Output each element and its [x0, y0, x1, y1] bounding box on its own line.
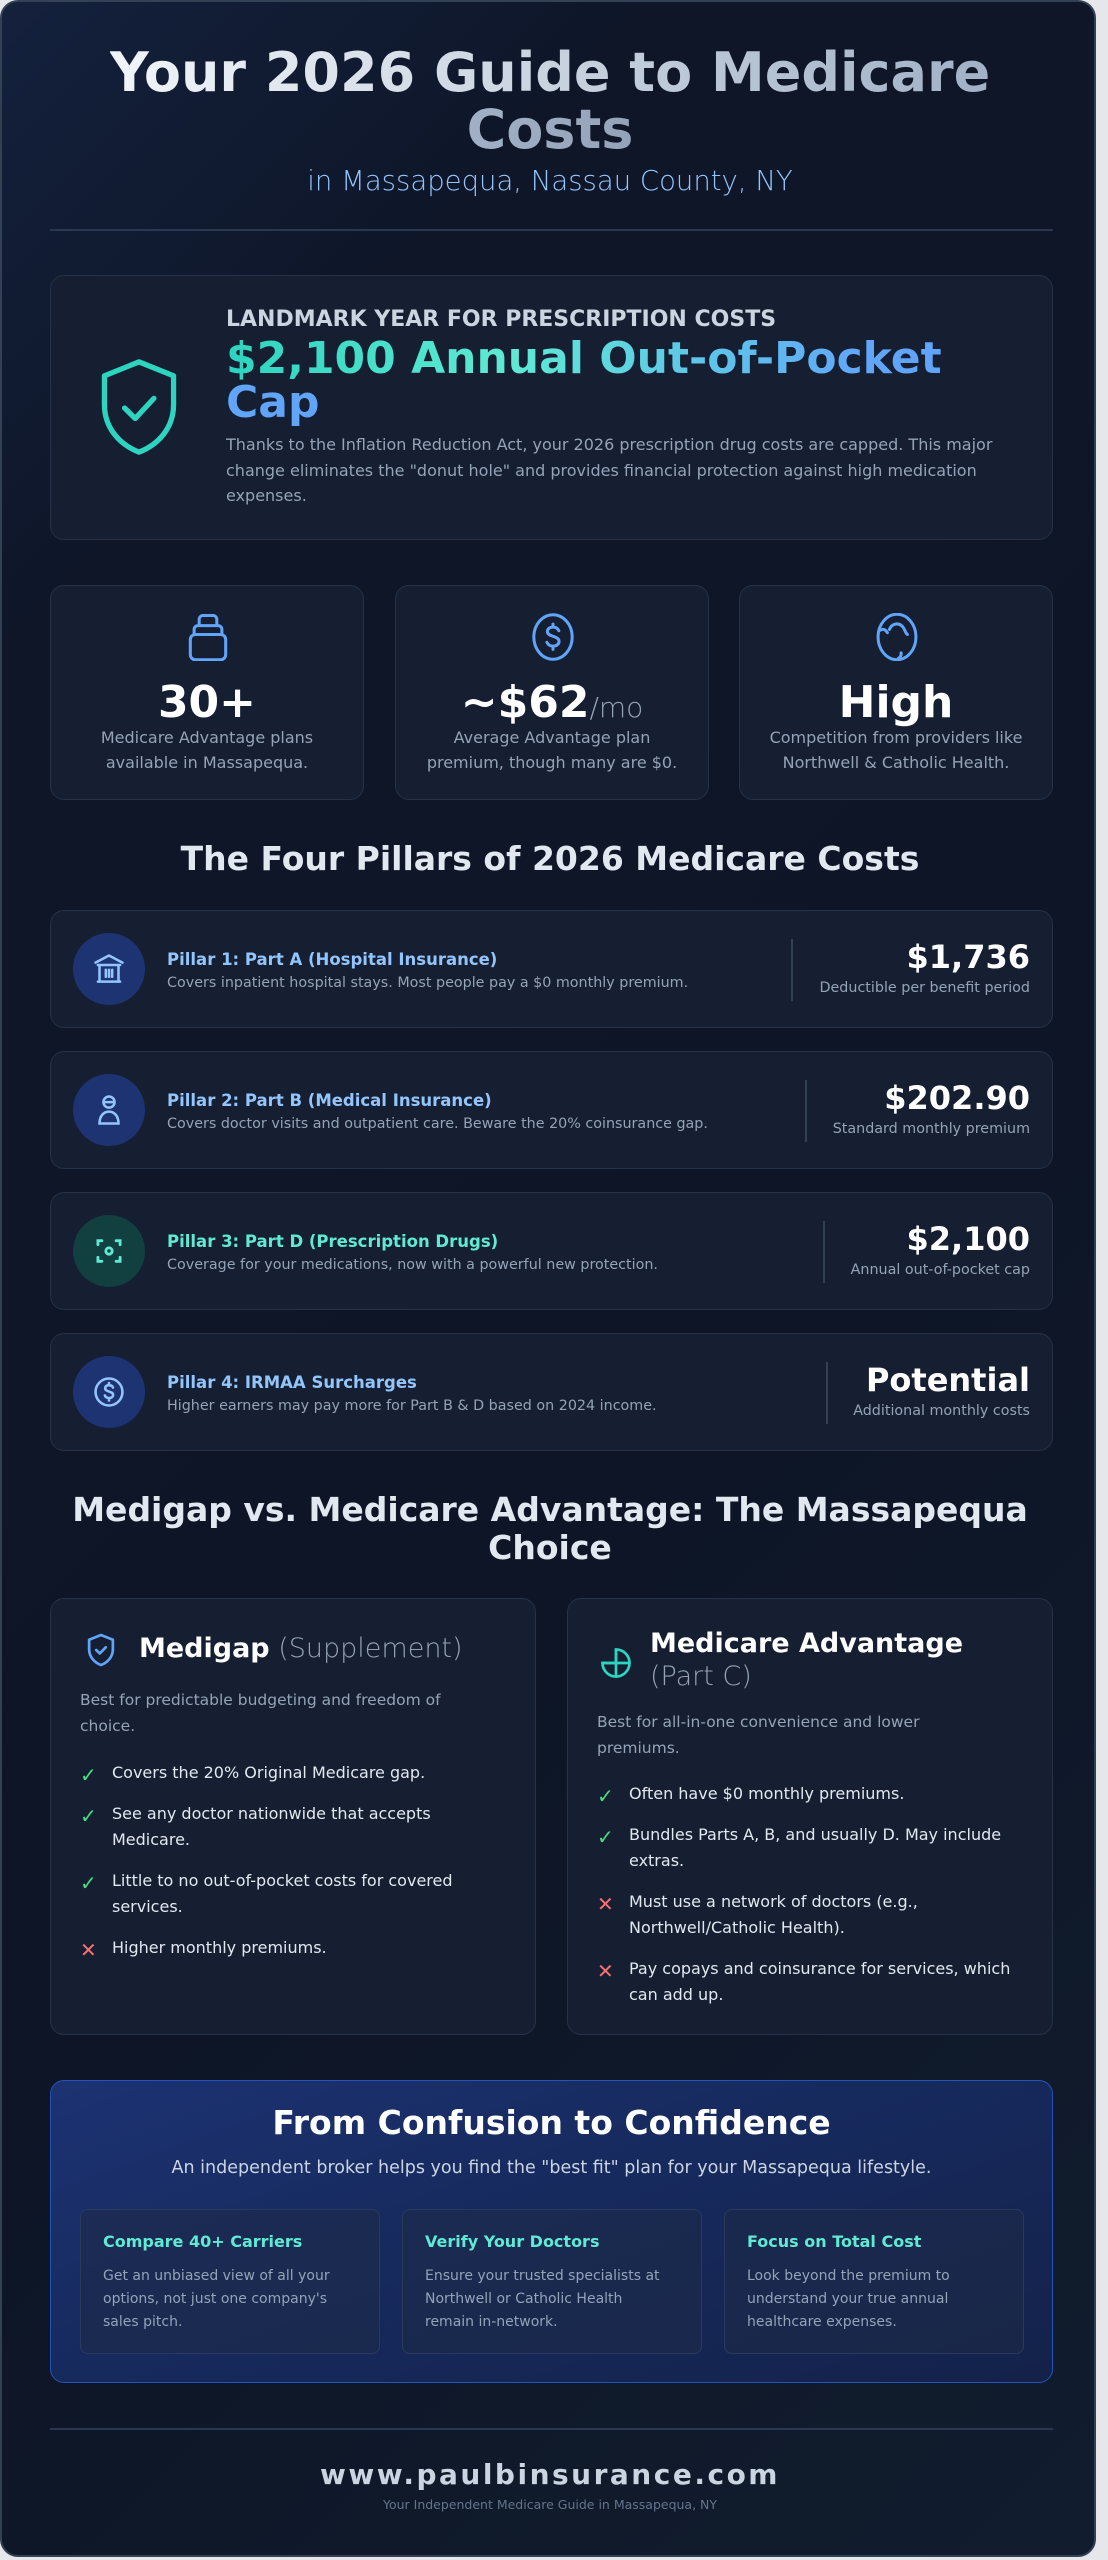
- footer url: www.paulbinsurance.com: [320, 2458, 780, 2491]
- pillar 1: [50, 910, 1053, 1028]
- tip: total cost: Focus on Total Cost: [747, 2232, 921, 2251]
- footer tagline: Your Independent Medicare Guide in Massapequa, NY: [383, 2497, 717, 2512]
- pillar 1: Covers inpatient hospital stays. Most people pay a $0 monthly premium.: [167, 975, 688, 991]
- icon: doctor: [73, 1074, 145, 1146]
- hero paragraph: Thanks to the Inflation Reduction Act, your 2026 prescription drug costs are capped. This major change eliminates the "donut hole" and provides financial protection against high medication expenses.: [226, 435, 992, 505]
- pillar 1: Deductible per benefit period: [820, 980, 1030, 996]
- stat card: premium: ~$62/mo: [461, 677, 643, 728]
- icon: shield check: [102, 359, 176, 455]
- tip: total cost: [724, 2209, 1024, 2354]
- list: advantage pros/cons: ✓: [597, 1825, 614, 1849]
- title: Costs: [467, 98, 633, 161]
- list: advantage pros/cons: Often have $0 monthly premiums.: [629, 1784, 904, 1803]
- list: medigap pros/cons: Covers the 20% Original Medicare gap.: [112, 1763, 425, 1782]
- tip: verify doctors: Verify Your Doctors: [425, 2232, 599, 2251]
- panel: medicare advantage: (Part C): [650, 1661, 752, 1692]
- pillar 2: Covers doctor visits and outpatient care. Beware the 20% coinsurance gap.: [167, 1116, 708, 1132]
- list: advantage pros/cons: ✕: [597, 1959, 614, 1983]
- list: medigap pros/cons: ✓: [80, 1763, 97, 1787]
- pillar 4: Pillar 4: IRMAA Surcharges: [167, 1373, 417, 1392]
- callout: confusion to confidence: From Confusion to Confidence: [272, 2103, 831, 2142]
- list: medigap pros/cons: ✓: [80, 1804, 97, 1828]
- hero headline: $2,100 Annual Out-of-Pocket: [226, 333, 942, 384]
- panel: medicare advantage: Medicare Advantage: [650, 1628, 963, 1659]
- pillar 3: [50, 1192, 1053, 1310]
- callout: confusion to confidence: [50, 2080, 1053, 2383]
- tip: compare carriers: [80, 2209, 380, 2354]
- hero label: LANDMARK YEAR FOR PRESCRIPTION COSTS: [226, 307, 776, 332]
- list: medigap pros/cons: ✕: [80, 1938, 97, 1962]
- tip: total cost: Look beyond the premium to understand your true annual healthcare expenses.: [747, 2268, 950, 2330]
- pillar 2: [50, 1051, 1053, 1169]
- list: medigap pros/cons: Little to no out-of-pocket costs for covered services.: [112, 1871, 453, 1916]
- icon: shield: [88, 1634, 114, 1666]
- list: advantage pros/cons: ✓: [597, 1784, 614, 1808]
- subtitle: in Massapequa, Nassau County, NY: [307, 165, 793, 197]
- pillar 3: Coverage for your medications, now with a powerful new protection.: [167, 1257, 658, 1273]
- stat card: plans: Medicare Advantage plans available in Massapequa.: [101, 728, 313, 772]
- heading: medigap vs advantage: Choice: [488, 1528, 612, 1567]
- heading: medigap vs advantage: Medigap vs. Medicare Advantage: The Massapequa: [72, 1490, 1028, 1529]
- list: advantage pros/cons: [597, 1784, 1010, 2004]
- stat card: plans: [50, 585, 364, 800]
- pillar 2: $202.90: [884, 1079, 1030, 1117]
- icon: hospital: [73, 933, 145, 1005]
- icon: dollar: [73, 1356, 145, 1428]
- hero headline: Cap: [226, 377, 319, 428]
- pillar 4: [50, 1333, 1053, 1451]
- panel: medigap: Medigap (Supplement): [139, 1633, 463, 1664]
- icon: pie: [601, 1648, 631, 1678]
- list: medigap pros/cons: [80, 1763, 453, 1962]
- pillar 4: Potential: [866, 1361, 1030, 1399]
- list: advantage pros/cons: ✕: [597, 1892, 614, 1916]
- list: medigap pros/cons: See any doctor nationwide that accepts Medicare.: [112, 1804, 431, 1849]
- hero headline: [226, 333, 942, 428]
- pillar 3: $2,100: [907, 1220, 1030, 1258]
- title: [110, 41, 990, 161]
- tip: compare carriers: Get an unbiased view of all your options, not just one company's sales pitch.: [103, 2268, 330, 2330]
- stat card: competition: Competition from providers like Northwell & Catholic Health.: [770, 728, 1022, 772]
- panel: medigap: [50, 1598, 536, 2035]
- icon: archive: [188, 614, 228, 661]
- pillar 3: Annual out-of-pocket cap: [851, 1262, 1030, 1278]
- pillar 4: Higher earners may pay more for Part B & D based on 2024 income.: [167, 1398, 657, 1414]
- stat card: competition: High: [839, 677, 953, 728]
- heading: four pillars: The Four Pillars of 2026 Medicare Costs: [181, 839, 919, 878]
- icon: globe: [876, 613, 918, 661]
- callout: confusion to confidence: An independent broker helps you find the "best fit" plan for your Massapequa lifestyle.: [172, 2158, 931, 2178]
- list: advantage pros/cons: Must use a network of doctors (e.g., Northwell/Catholic Health).: [629, 1892, 918, 1937]
- pillar 1: Pillar 1: Part A (Hospital Insurance): [167, 950, 497, 969]
- panel: medigap: Best for predictable budgeting and freedom of choice.: [80, 1691, 441, 1735]
- list: medigap pros/cons: ✓: [80, 1871, 97, 1895]
- stat card: premium: [395, 585, 709, 800]
- pillar 1: $1,736: [907, 938, 1030, 976]
- list: medigap pros/cons: Higher monthly premiums.: [112, 1938, 327, 1957]
- stat card: competition: [739, 585, 1053, 800]
- tip: compare carriers: Compare 40+ Carriers: [103, 2232, 302, 2251]
- hero card: prescription cap: [50, 275, 1053, 540]
- panel: medicare advantage: [567, 1598, 1053, 2035]
- title: Your 2026 Guide to Medicare: [110, 41, 990, 104]
- icon: scan: [73, 1215, 145, 1287]
- pillar 4: Additional monthly costs: [853, 1403, 1030, 1419]
- tip: verify doctors: Ensure your trusted specialists at Northwell or Catholic Health remain in-network.: [425, 2268, 660, 2330]
- pillar 2: Standard monthly premium: [833, 1121, 1030, 1137]
- icon: dollar circle: [532, 613, 574, 661]
- pillar 3: Pillar 3: Part D (Prescription Drugs): [167, 1232, 498, 1251]
- heading: medigap vs advantage: [72, 1490, 1028, 1567]
- pillar 2: Pillar 2: Part B (Medical Insurance): [167, 1091, 492, 1110]
- stat card: plans: 30+: [158, 677, 256, 728]
- tip: verify doctors: [402, 2209, 702, 2354]
- list: advantage pros/cons: Pay copays and coinsurance for services, which can add up.: [629, 1959, 1010, 2004]
- list: advantage pros/cons: Bundles Parts A, B, and usually D. May include extras.: [629, 1825, 1001, 1870]
- stat card: premium: Average Advantage plan premium, though many are $0.: [427, 728, 677, 772]
- panel: medicare advantage: Best for all-in-one convenience and lower premiums.: [597, 1713, 919, 1757]
